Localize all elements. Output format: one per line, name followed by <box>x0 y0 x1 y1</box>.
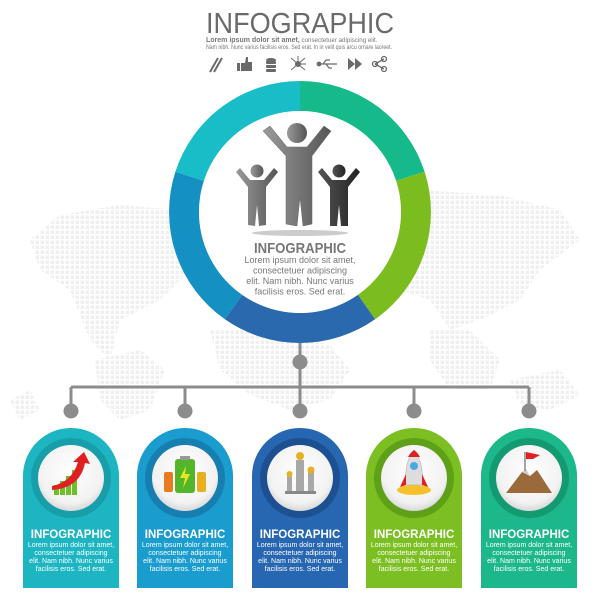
background: dotted world map <box>10 190 580 420</box>
center text: consectetuer adipiscing <box>253 266 347 276</box>
icon: tools <box>210 58 222 72</box>
icon: fast forward <box>348 58 362 70</box>
subtitle text: Nam nibh. Nunc varius facilisis eros. Sed erat. In in velit quis arcu ornare laoreet. <box>206 44 392 51</box>
icon: family <box>236 123 360 236</box>
card 4: rocket: consectetuer adipiscing <box>377 550 451 557</box>
center text <box>244 240 356 296</box>
icon: network <box>291 56 306 70</box>
card 2: battery: INFOGRAPHIC <box>145 529 225 541</box>
card 5: mountain: elit. Nam nibh. Nunc varius <box>487 558 571 565</box>
icon: thumbs up <box>237 57 252 71</box>
icon: share <box>372 56 386 72</box>
card 1: growth: elit. Nam nibh. Nunc varius <box>29 558 113 565</box>
card 4: rocket: Lorem ipsum dolor sit amet, <box>371 542 457 549</box>
card 3: chess: facilisis eros. Sed erat. <box>265 566 335 573</box>
card 3: chess: INFOGRAPHIC <box>260 529 340 541</box>
card 3: chess: elit. Nam nibh. Nunc varius <box>258 558 342 565</box>
main ring chart <box>184 96 416 328</box>
card 2: battery: facilisis eros. Sed erat. <box>150 566 220 573</box>
title: INFOGRAPHIC <box>206 8 394 40</box>
card 1: growth: INFOGRAPHIC <box>31 529 111 541</box>
card 4: rocket: elit. Nam nibh. Nunc varius <box>372 558 456 565</box>
card 5: mountain: INFOGRAPHIC <box>489 529 569 541</box>
card 4: rocket: INFOGRAPHIC <box>374 529 454 541</box>
icon row <box>210 56 386 72</box>
card 5: mountain: facilisis eros. Sed erat. <box>494 566 564 573</box>
card 2: battery: consectetuer adipiscing <box>148 550 222 557</box>
icon: mountain with flag <box>506 452 552 493</box>
icon: database <box>266 58 276 72</box>
card 1: growth: facilisis eros. Sed erat. <box>36 566 106 573</box>
card 5: mountain: Lorem ipsum dolor sit amet, <box>486 542 572 549</box>
card 3: chess <box>252 428 348 588</box>
card 1: growth: consectetuer adipiscing <box>34 550 108 557</box>
icon: chess pieces <box>285 452 316 494</box>
card 3: chess: Lorem ipsum dolor sit amet, <box>257 542 343 549</box>
card 2: battery: Lorem ipsum dolor sit amet, <box>142 542 228 549</box>
card 2: battery <box>137 428 233 588</box>
card 1: growth: Lorem ipsum dolor sit amet, <box>28 542 114 549</box>
card 5: mountain: consectetuer adipiscing <box>492 550 566 557</box>
center text: Lorem ipsum dolor sit amet, <box>244 255 356 265</box>
card 2: battery: elit. Nam nibh. Nunc varius <box>143 558 227 565</box>
subtitle text: Lorem ipsum dolor sit amet, consectetuer adipiscing elit. <box>206 37 378 44</box>
card 3: chess: consectetuer adipiscing <box>263 550 337 557</box>
card 4: rocket <box>366 428 462 588</box>
icon: batteries <box>164 456 206 493</box>
center text: INFOGRAPHIC <box>254 240 346 257</box>
icon: usb <box>317 60 337 68</box>
center text: elit. Nam nibh. Nunc varius <box>246 276 354 286</box>
center text: facilisis eros. Sed erat. <box>255 286 345 296</box>
icon: growth chart <box>52 452 90 495</box>
connector tree <box>64 343 536 418</box>
subtitle text <box>206 37 392 51</box>
card 4: rocket: facilisis eros. Sed erat. <box>379 566 449 573</box>
card 5: mountain <box>481 428 577 588</box>
card 1: growth <box>23 428 119 588</box>
icon: rocket <box>397 450 431 495</box>
